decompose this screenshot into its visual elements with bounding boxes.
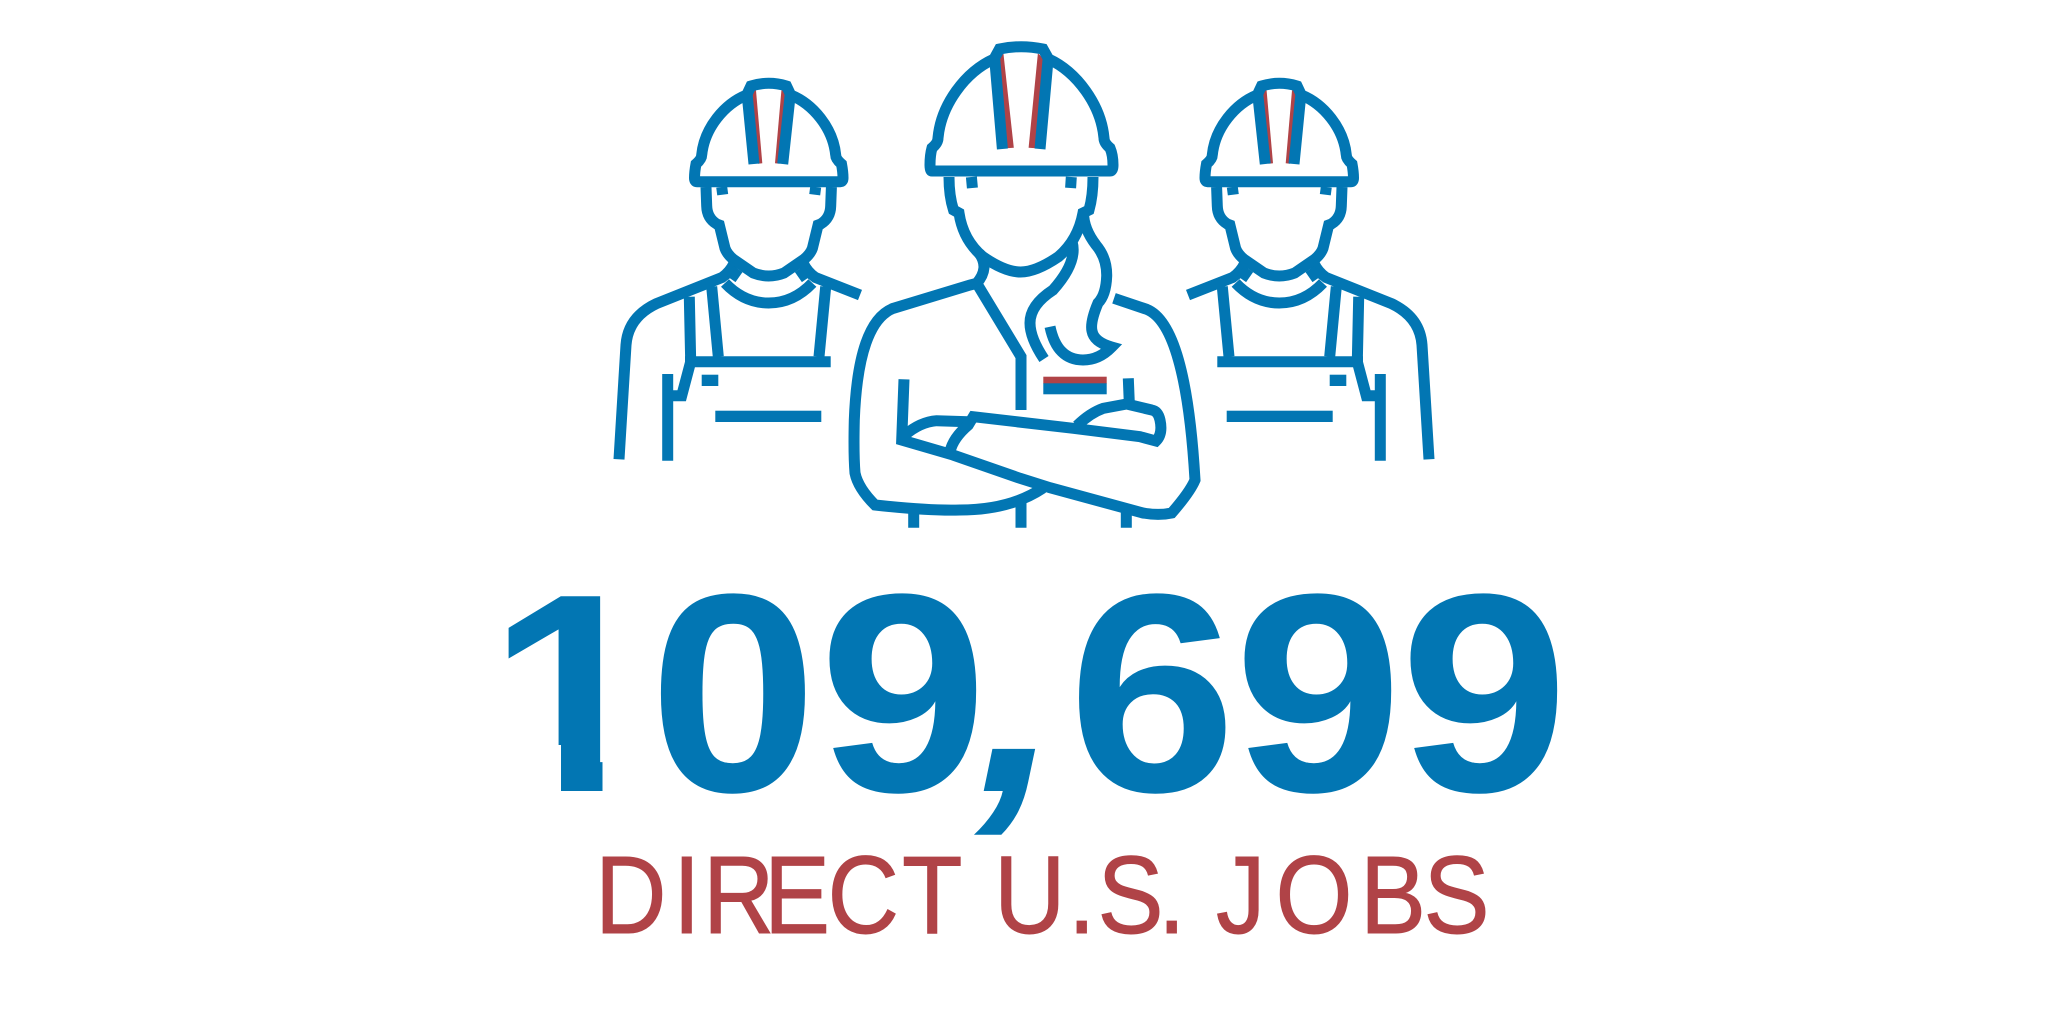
big number: 109,699 [488,536,1568,852]
caption: direct U.S. jobs: DIRECT U.S. JOBS [595,834,1490,957]
icon: central worker with crossed arms [854,47,1195,528]
icon: left construction worker [619,83,860,461]
icon: right construction worker [1188,83,1429,461]
icon: name badge [1043,377,1107,394]
